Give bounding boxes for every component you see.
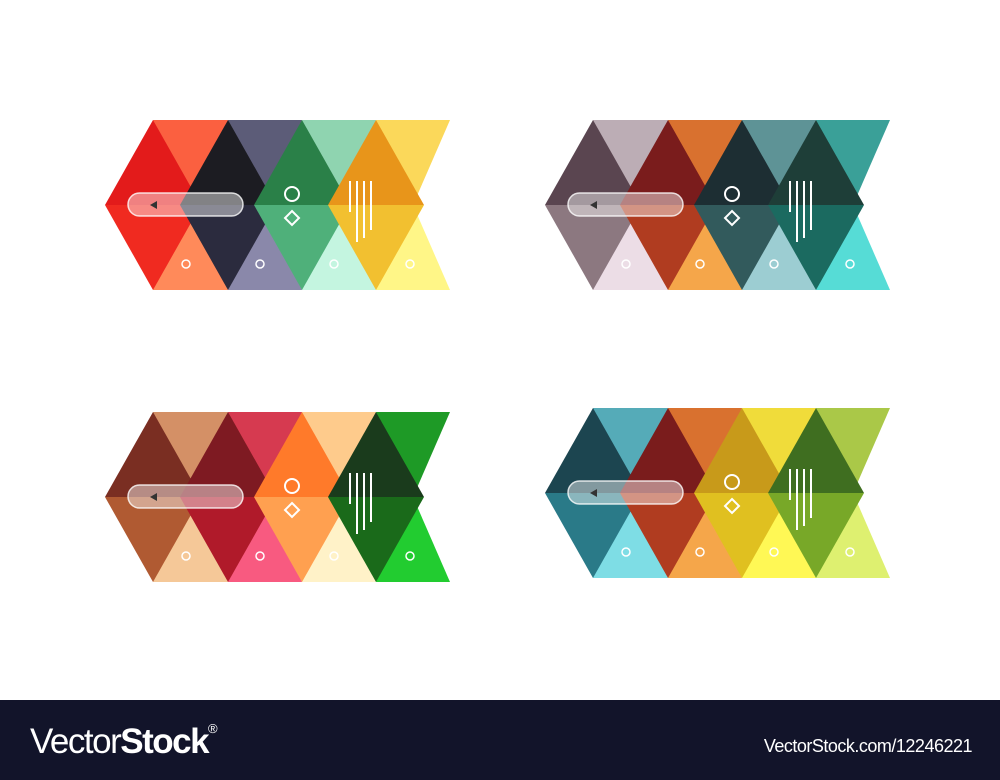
footer bar	[0, 700, 1000, 780]
arrow: warm red to yellow	[105, 120, 450, 290]
footer url: VectorStock.com/12246221	[764, 736, 972, 756]
arrow: teal to lime	[545, 408, 890, 578]
footer logo: VectorStock	[30, 722, 208, 761]
arrow: brown to green	[105, 412, 450, 582]
footer logo: ®	[208, 721, 218, 736]
arrow: mauve to teal	[545, 120, 890, 290]
